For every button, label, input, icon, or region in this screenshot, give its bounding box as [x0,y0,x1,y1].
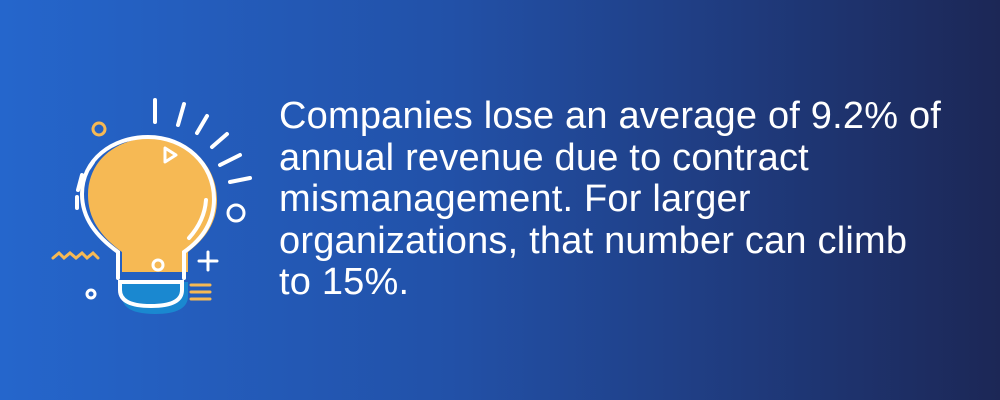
bulb fill [88,138,217,314]
text block: statistic: organizations, that number can climb [279,220,907,262]
text block: statistic [279,95,941,303]
text block: statistic: to 15%. [279,261,409,303]
text block: statistic: mismanagement. For larger [279,178,751,220]
text block: statistic: annual revenue due to contract [279,136,809,178]
text block: statistic: Companies lose an average of 9.2% of [279,95,941,137]
bulb outline [77,100,250,306]
icon: light bulb [51,98,252,314]
decorations: orange [53,123,210,299]
